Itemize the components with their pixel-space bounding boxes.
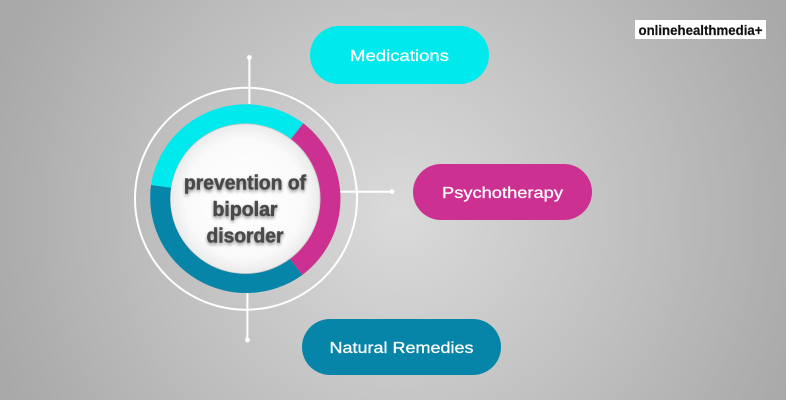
connector: top line [247,55,252,104]
segment: blue [150,185,302,293]
connector: right line [340,189,394,194]
center title: prevention of [184,172,306,194]
center circle [170,124,320,273]
logo: onlinehealthmedia+ [638,22,762,38]
pill: Medications [310,26,489,84]
pill: Natural Remedies: Natural Remedies [330,340,474,357]
donut ring [150,104,340,293]
center title [184,172,306,248]
segment: cyan [151,104,303,188]
connector: bottom line [245,293,250,342]
pill: Natural Remedies [302,319,501,375]
pill: Medications: Medications [350,48,449,65]
center title: disorder [206,226,284,248]
outer ring [135,88,357,310]
segment: magenta [290,123,340,275]
pill: Psychotherapy: Psychotherapy [442,185,563,202]
pill: Psychotherapy [413,164,592,220]
center title: bipolar [212,199,278,221]
